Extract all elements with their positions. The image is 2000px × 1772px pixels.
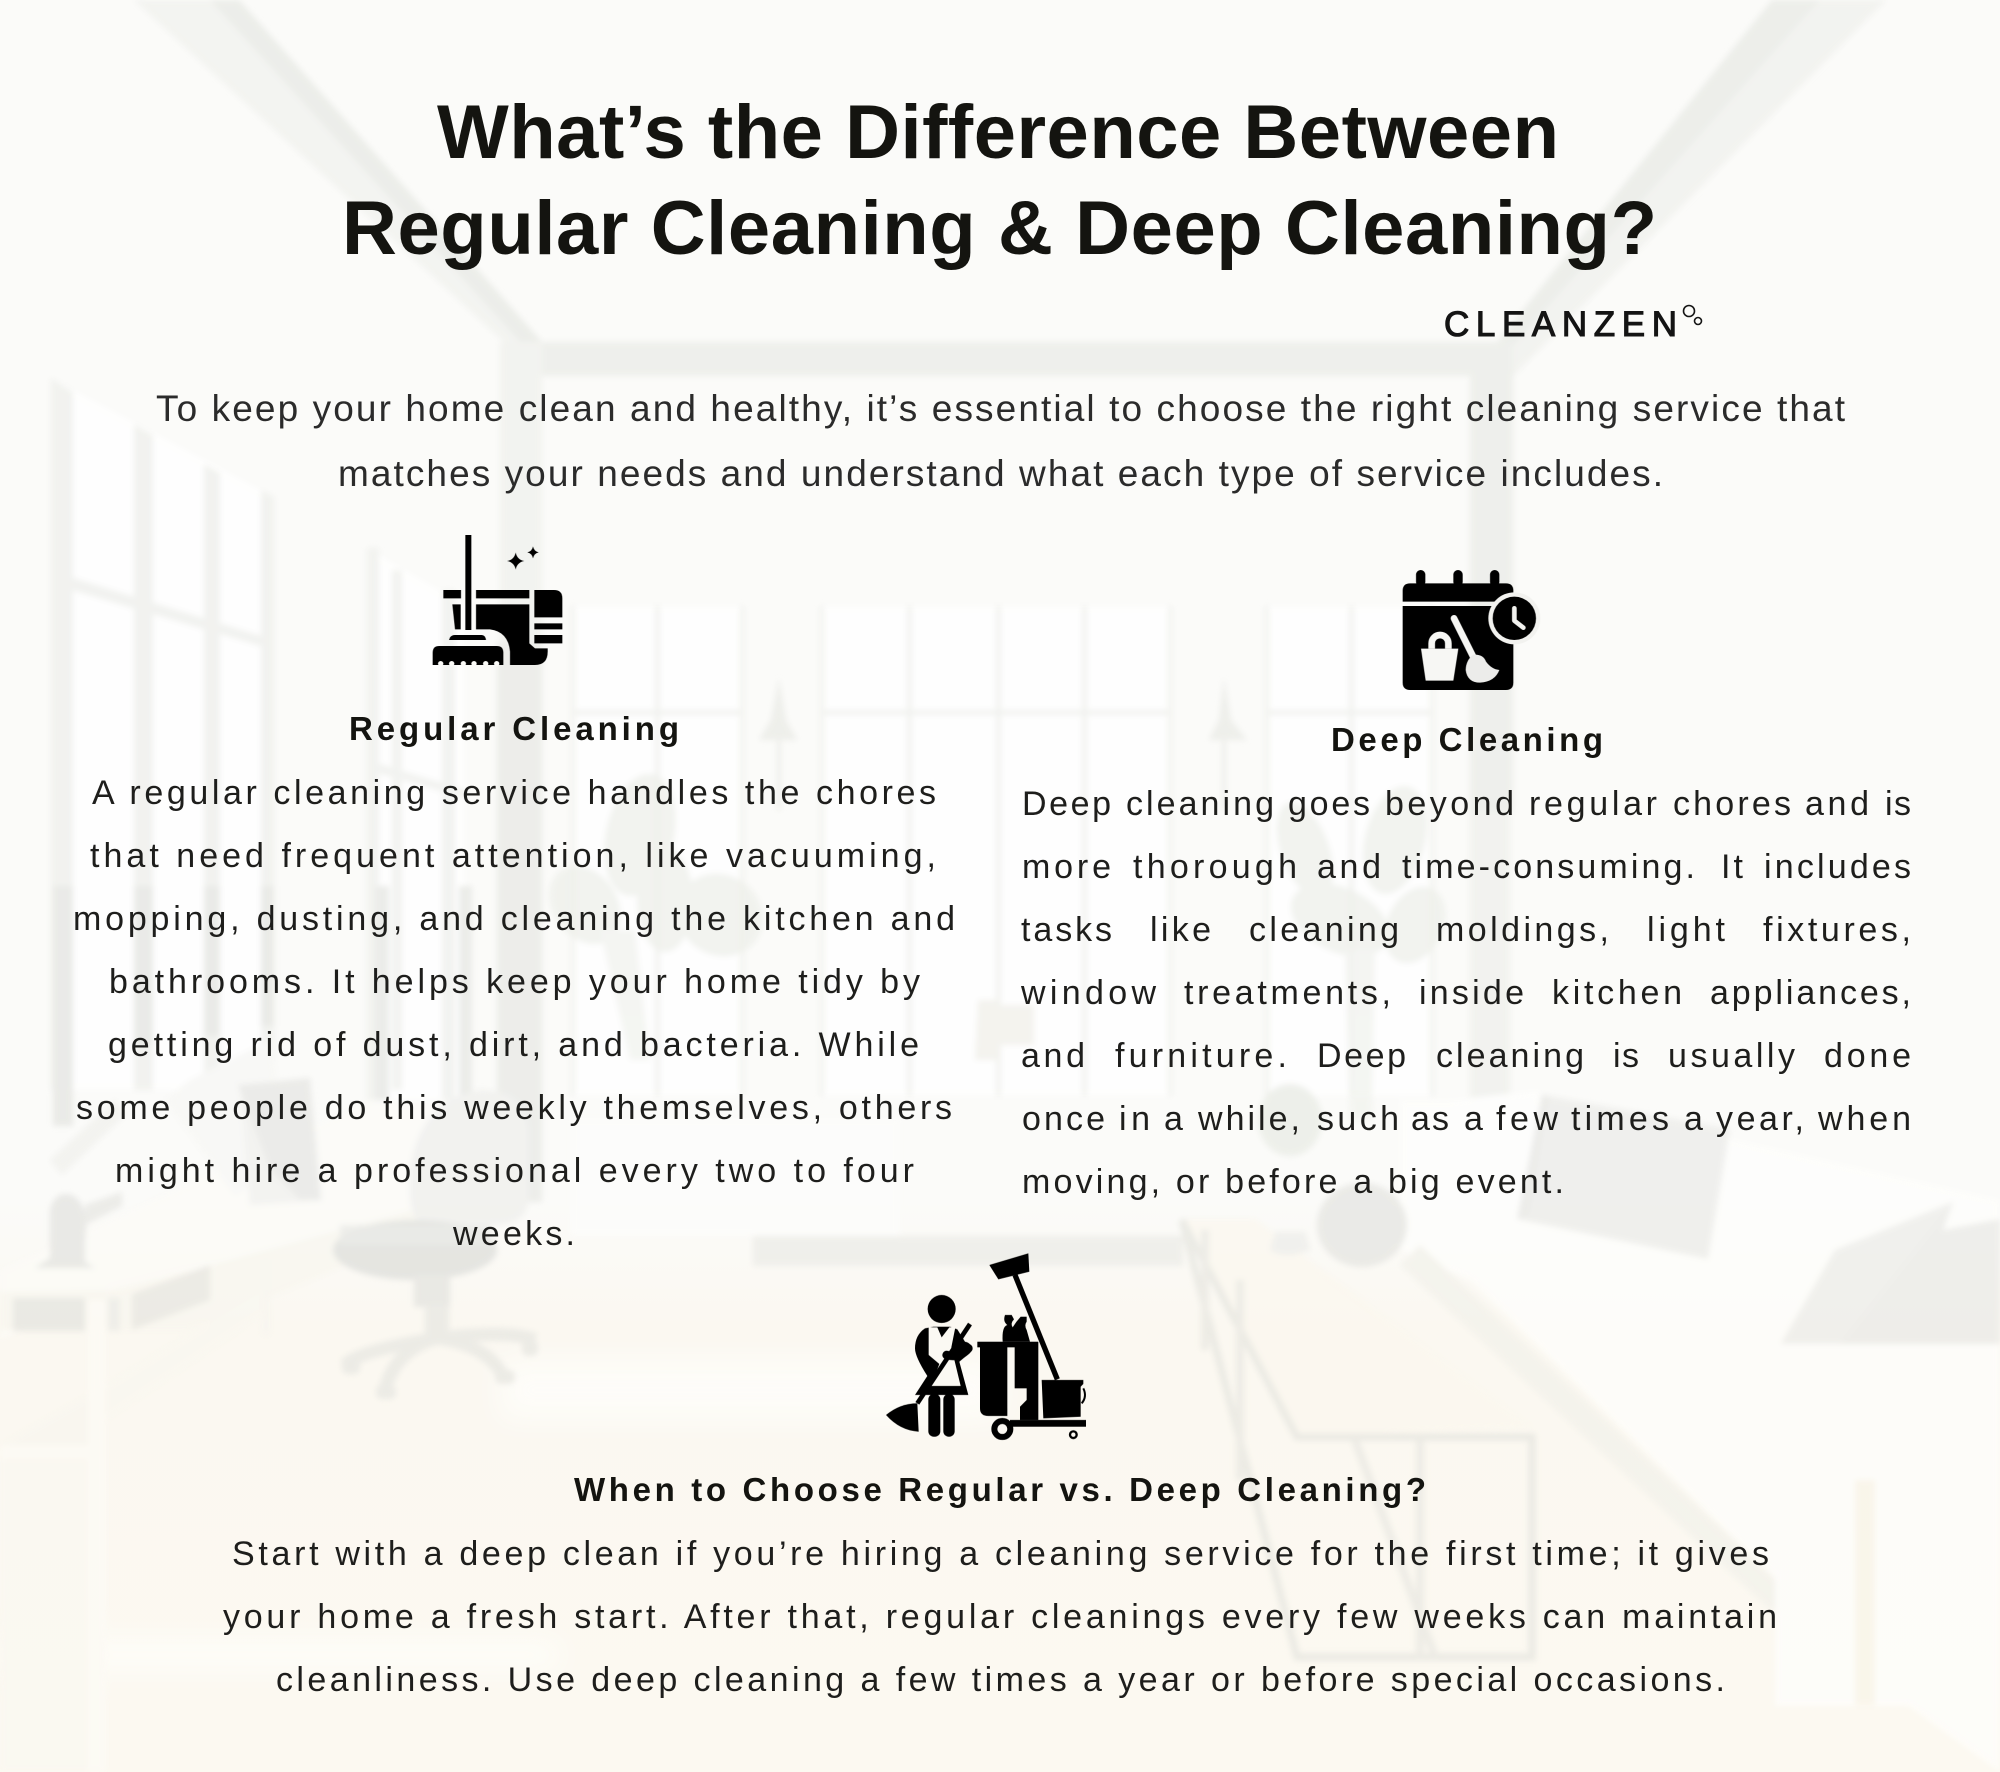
text block: regular cleaning description: A regular cleaning service handles the chores [92, 774, 936, 812]
text block: deep cleaning description: a [1164, 1100, 1183, 1138]
text block: deep cleaning description: moving, or before a big event. [1022, 1163, 1564, 1201]
text block: deep cleaning description [1020, 785, 1911, 1201]
text block: deep cleaning description: few [1496, 1100, 1558, 1138]
text block: deep cleaning description: It [1721, 848, 1744, 886]
title: Regular Cleaning & Deep Cleaning? [342, 186, 1657, 271]
text block: deep cleaning description: as [1411, 1100, 1449, 1138]
text block: deep cleaning description: is [1885, 785, 1911, 823]
text block: regular cleaning description: bathrooms. It helps keep your home tidy by [109, 963, 920, 1001]
intro text: matches your needs and understand what each type of service includes. [338, 453, 1663, 494]
text block: deep cleaning description: tasks [1021, 911, 1112, 949]
intro text [156, 388, 1846, 494]
text block: regular cleaning description: some people do this weekly themselves, others [76, 1089, 952, 1127]
text block: deep cleaning description: Deep [1022, 785, 1111, 823]
text block: deep cleaning description: while, [1197, 1100, 1300, 1138]
text block: regular cleaning description: weeks. [452, 1215, 575, 1253]
text block: deep cleaning description: and [1021, 1037, 1085, 1075]
heading: Regular Cleaning: Regular Cleaning [349, 710, 679, 747]
text block: deep cleaning description: moldings, [1436, 911, 1609, 949]
text block: deep cleaning description: appliances, [1710, 974, 1911, 1012]
text block: deep cleaning description: once [1022, 1100, 1105, 1138]
text block: deep cleaning description: a [1684, 1100, 1703, 1138]
text block: deep cleaning description: times [1571, 1100, 1669, 1138]
text block: deep cleaning description: cleaning [1126, 785, 1274, 823]
text block: deep cleaning description: treatments, [1184, 974, 1391, 1012]
text block: deep cleaning description: inside [1419, 974, 1524, 1012]
text block: deep cleaning description: furniture. [1115, 1037, 1287, 1075]
text block: deep cleaning description: a [1464, 1100, 1483, 1138]
text block: deep cleaning description: usually [1668, 1037, 1795, 1075]
text block: deep cleaning description: more [1022, 848, 1111, 886]
title: What’s the Difference Between [437, 90, 1559, 175]
text block: regular cleaning description: getting rid of dust, dirt, and bacteria. While [108, 1026, 919, 1064]
text block: deep cleaning description: such [1317, 1100, 1399, 1138]
text block: when to choose description: Start with a deep clean if you’re hiring a cleaning service for the first time; it gives [232, 1535, 1769, 1573]
text block: deep cleaning description: year, [1716, 1100, 1804, 1138]
text block: regular cleaning description: might hire a professional every two to four [115, 1152, 914, 1190]
text block: deep cleaning description: beyond [1385, 785, 1514, 823]
text block: deep cleaning description: kitchen [1552, 974, 1682, 1012]
heading: Deep Cleaning: Deep Cleaning [1331, 721, 1603, 758]
text block: regular cleaning description: that need frequent attention, like vacuuming, [90, 837, 936, 875]
text block: deep cleaning description: thorough [1133, 848, 1297, 886]
icon: cleaner with cart [886, 1253, 1086, 1438]
text block: deep cleaning description: is [1613, 1037, 1639, 1075]
text block: deep cleaning description: like [1150, 911, 1211, 949]
text block: deep cleaning description: cleaning [1436, 1037, 1584, 1075]
text block: when to choose description: cleanliness. Use deep cleaning a few times a year or before special occasions. [276, 1661, 1725, 1699]
text block: deep cleaning description: light [1647, 911, 1726, 949]
text block: deep cleaning description: when [1817, 1100, 1911, 1138]
text block: deep cleaning description: time-consuming. [1402, 848, 1695, 886]
text block: deep cleaning description: goes [1288, 785, 1370, 823]
text block: when to choose description [223, 1535, 1777, 1699]
text block: when to choose description: your home a fresh start. After that, regular cleanings every few weeks can maintain [223, 1598, 1777, 1636]
text block: deep cleaning description: fixtures, [1763, 911, 1911, 949]
text block: deep cleaning description: chores [1673, 785, 1791, 823]
text block: regular cleaning description: mopping, dusting, and cleaning the kitchen and [73, 900, 955, 938]
icon: calendar with bucket and broom [1403, 570, 1540, 690]
text block: deep cleaning description: Deep [1317, 1037, 1406, 1075]
text block: deep cleaning description: cleaning [1249, 911, 1399, 949]
logo: CLEANZEN: CLEANZEN [1444, 305, 1677, 344]
title [342, 90, 1657, 271]
heading: When to Choose: When to Choose Regular vs. Deep Cleaning? [574, 1471, 1426, 1508]
intro text: To keep your home clean and healthy, it’s essential to choose the right cleaning service that [156, 388, 1846, 429]
text block: deep cleaning description: regular [1529, 785, 1657, 823]
icon: mop and bucket [433, 535, 562, 666]
text block: deep cleaning description: window [1020, 974, 1156, 1012]
text block: deep cleaning description: and [1317, 848, 1381, 886]
text block: deep cleaning description: done [1824, 1037, 1911, 1075]
text block: deep cleaning description: and [1805, 785, 1869, 823]
text block: deep cleaning description: includes [1764, 848, 1911, 886]
text block: deep cleaning description: in [1119, 1100, 1150, 1138]
text block: regular cleaning description [73, 774, 955, 1253]
